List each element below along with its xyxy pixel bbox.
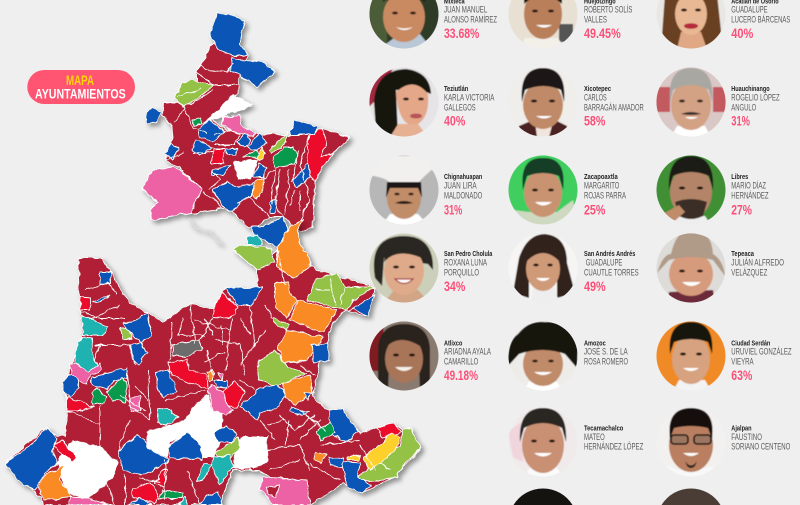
photo: Ariadna Ayala [369, 321, 439, 391]
text: Amozoc: JOSÉ S. DE LA [584, 347, 628, 358]
text: Atlixco [444, 338, 491, 383]
text: Mixteca: 33.68% [444, 26, 479, 41]
text: Teziutlán [444, 84, 495, 129]
candidate: Atlixco [369, 321, 491, 391]
text: Teziutlán: 40% [444, 114, 465, 129]
text: Xicotepec: BARRAGÁN AMADOR [584, 102, 644, 113]
text: San Andrés Andrés: CUAUTLE TORRES [584, 267, 639, 278]
candidate: Ajalpan [668, 408, 790, 476]
text: Amozoc: ROSA ROMERO [584, 356, 628, 367]
photo: Roberto Solís [508, 0, 578, 44]
text: Chignahuapan: Chignahuapan [444, 172, 483, 181]
text: San Andrés Andrés [584, 249, 639, 294]
photo: Carlos Barragán [518, 68, 568, 136]
text: San Pedro Cholula: PORQUILLO [444, 267, 479, 278]
candidate: Zacapoaxtla [508, 155, 626, 225]
text: Tecamachalco: HERNÁNDEZ LÓPEZ [584, 442, 643, 453]
pill label: mapa ayuntamientos: MAPA [66, 72, 94, 88]
text: San Pedro Cholula: 34% [444, 279, 465, 294]
photo: cropped candidate, third column bottom [662, 488, 720, 505]
text: San Andrés Andrés: GUADALUPE [586, 258, 622, 269]
text: Huauchinango: Huauchinango [731, 84, 770, 93]
text: Mixteca [444, 0, 497, 41]
text: Chignahuapan: MALDONADO [444, 190, 482, 201]
text: Amozoc [584, 338, 628, 367]
text: Huejotzingo [584, 0, 632, 41]
text: Atlixco: CAMARILLO [444, 356, 478, 367]
text: Teziutlán: KARLA VICTORIA [444, 93, 495, 104]
text: Atlixco: ARIADNA AYALA [444, 347, 491, 358]
text: Zacapoaxtla: MARGARITO [584, 181, 619, 192]
photo: Roxana Luna [369, 233, 439, 303]
pill label: mapa ayuntamientos: AYUNTAMIENTOS [35, 86, 126, 102]
text: Zacapoaxtla: ROJAS PARRA [584, 190, 626, 201]
text: Xicotepec [584, 84, 644, 129]
photo: Juan Manuel Alonso [369, 0, 439, 49]
text: Libres: Libres [731, 172, 748, 181]
candidate: Huejotzingo [508, 0, 632, 44]
candidate: Tepeaca [656, 231, 784, 303]
photo: Guadalupe Lucero [656, 0, 726, 49]
text: Huejotzingo: VALLES [584, 15, 607, 26]
photo: Julián Alfredo [656, 231, 726, 303]
text: Tepeaca [731, 249, 784, 278]
text: Huejotzingo: ROBERTO SOLÍS [584, 5, 632, 16]
candidate: San Andrés Andrés [514, 234, 638, 298]
photo: Karla Victoria [369, 67, 439, 137]
text: Amozoc: Amozoc [584, 338, 606, 347]
text: Libres [731, 172, 769, 217]
text: Ajalpan [731, 423, 790, 453]
text: Huauchinango: 31% [731, 114, 750, 129]
candidate: Ciudad Serdán [656, 321, 792, 391]
photo: Margarito Rojas [508, 155, 578, 225]
photo: Juan Lira [369, 155, 439, 225]
text: Atlixco: Atlixco [444, 338, 463, 347]
candidate: Huauchinango [656, 67, 780, 137]
photo: Mateo Hernández [509, 408, 568, 476]
text: San Andrés Andrés: 49% [584, 279, 606, 294]
text: Chignahuapan: JUAN LIRA [444, 181, 477, 192]
text: Mixteca: JUAN MANUEL [444, 5, 488, 16]
photo: Guadalupe Cuautle [514, 234, 574, 298]
text: Ciudad Serdán: 63% [731, 368, 752, 383]
text: Tecamachalco: MATEO [584, 432, 605, 443]
map: south section of municipalities [5, 220, 421, 505]
text: Tecamachalco: Tecamachalco [584, 423, 624, 432]
photo: Rogelio López [656, 67, 727, 137]
text: Ciudad Serdán: Ciudad Serdán [731, 338, 771, 347]
text: Atlixco: 49.18% [444, 368, 478, 383]
candidate: San Pedro Cholula [369, 233, 493, 303]
text: San Pedro Cholula: ROXANA LUNA [444, 258, 487, 269]
pill label: mapa ayuntamientos [27, 70, 135, 104]
text: Ajalpan: Ajalpan [731, 423, 752, 432]
candidate: Xicotepec [508, 67, 644, 137]
text: Ajalpan: FAUSTINO [731, 432, 762, 443]
candidate: Tecamachalco [508, 407, 643, 477]
photo: José S. de la Rosa [508, 321, 578, 391]
text: Tecamachalco [584, 423, 643, 453]
text: Xicotepec: 58% [584, 114, 605, 129]
text: Tepeaca: Tepeaca [731, 249, 755, 258]
text: Chignahuapan [444, 172, 483, 217]
text: Teziutlán: Teziutlán [444, 84, 469, 93]
map: north section of municipalities [142, 13, 350, 248]
text: San Pedro Cholula [444, 249, 493, 294]
text: Libres: 27% [731, 202, 752, 217]
text: Ciudad Serdán: VIEYRA [731, 356, 754, 367]
text: Teziutlán: GALLEGOS [444, 102, 476, 113]
text: Tepeaca: VELÁZQUEZ [731, 267, 767, 278]
candidate: Teziutlán [369, 67, 495, 137]
text: Xicotepec: Xicotepec [584, 84, 611, 93]
text: Libres: MARIO DÍAZ [731, 181, 766, 192]
text: Zacapoaxtla: 25% [584, 202, 605, 217]
text: Huejotzingo: 49.45% [584, 26, 621, 41]
candidate: Chignahuapan [369, 155, 483, 225]
text: Chignahuapan: 31% [444, 202, 462, 217]
text: Acatlán de Osorio: 40% [731, 26, 753, 41]
candidate: Acatlán de Osorio [656, 0, 790, 49]
photo: cropped candidate, second column bottom [514, 488, 572, 505]
candidate: Amozoc [508, 321, 628, 391]
text: Mixteca: ALONSO RAMÍREZ [444, 15, 497, 26]
text: Acatlán de Osorio: GUADALUPE [731, 5, 768, 16]
photo: Uruviel González [656, 321, 726, 391]
text: Xicotepec: CARLOS [584, 93, 607, 104]
candidate: Libres [656, 155, 769, 225]
candidate: Mixteca [369, 0, 497, 49]
photo: Mario Díaz [656, 155, 726, 225]
text: San Pedro Cholula: San Pedro Cholula [444, 249, 493, 258]
text: Huauchinango: ANGULO [731, 102, 756, 113]
text: San Andrés Andrés: San Andrés Andrés [584, 249, 635, 258]
photo: Faustino Soriano [668, 408, 714, 476]
text: Libres: HERNÁNDEZ [731, 190, 769, 201]
river trace [190, 218, 222, 245]
text: Huauchinango [731, 84, 780, 129]
text: Zacapoaxtla: Zacapoaxtla [584, 172, 618, 181]
text: Acatlán de Osorio [731, 0, 790, 41]
text: Ciudad Serdán [731, 338, 792, 383]
text: Zacapoaxtla [584, 172, 626, 217]
